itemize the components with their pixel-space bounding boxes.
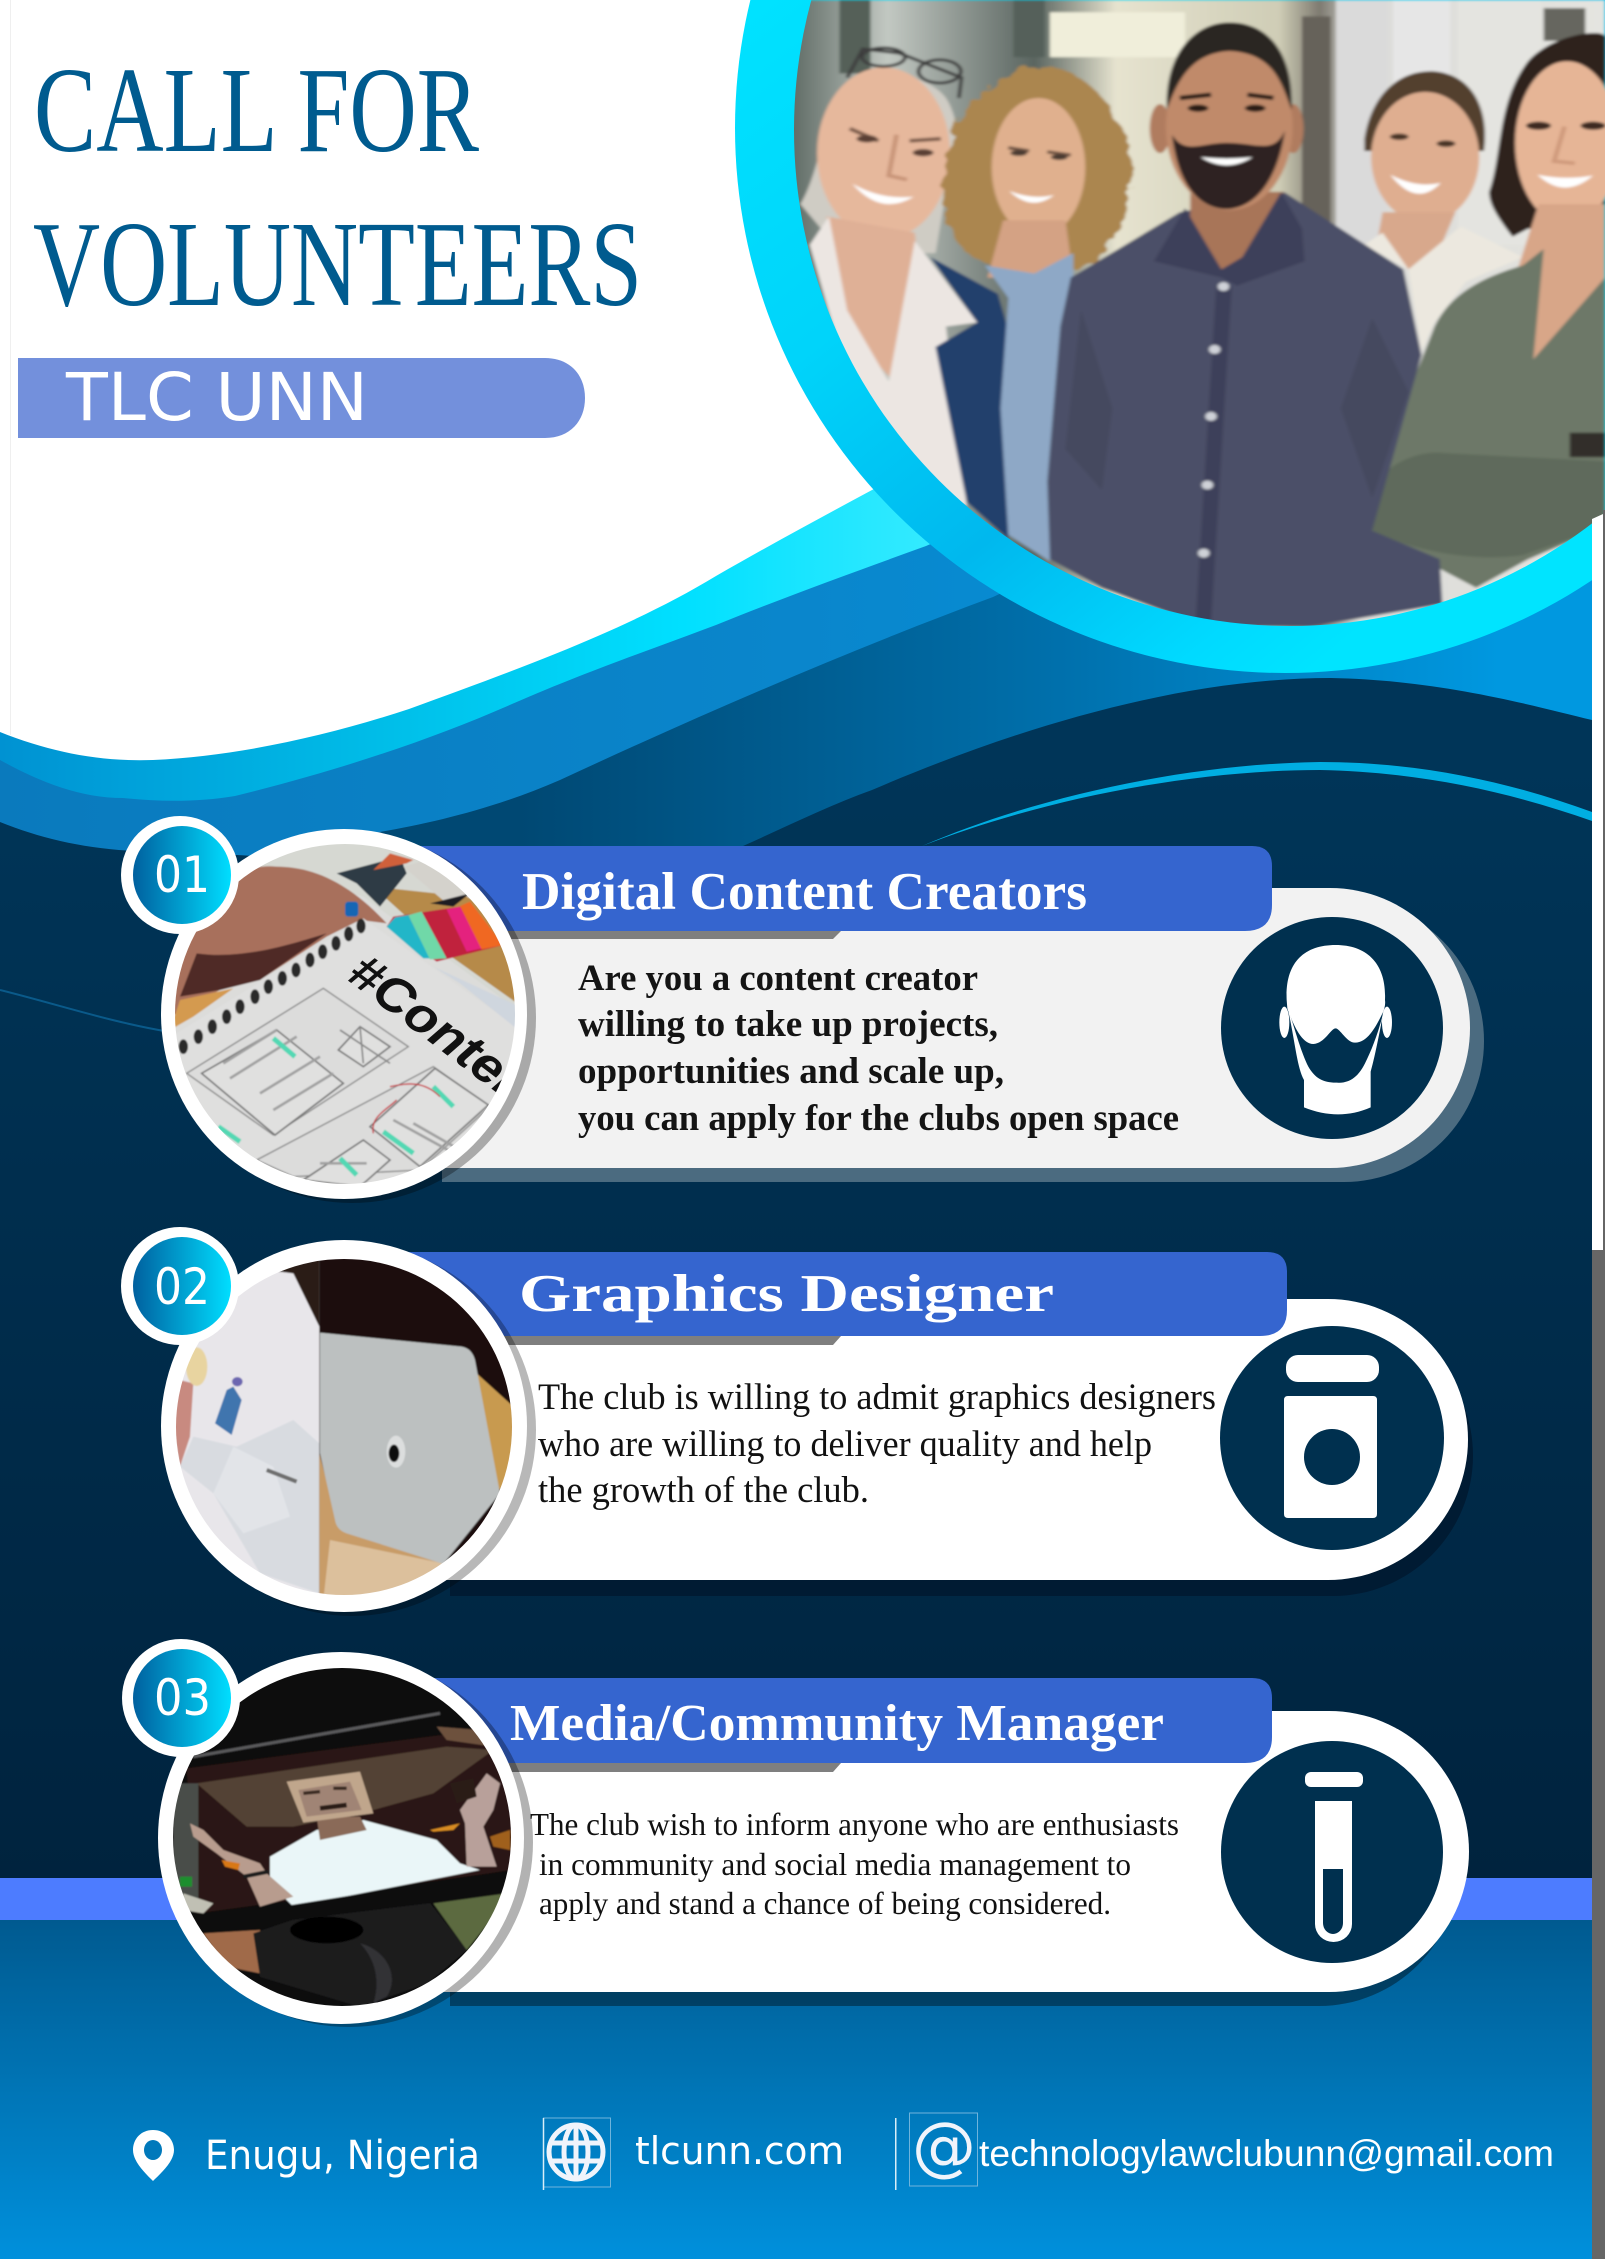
icon: bottle [1220, 1326, 1444, 1550]
heading: call for volunteers: CALL FOR [34, 43, 479, 178]
card 3 text: in community and social media management to [539, 1846, 1131, 1882]
footer background [0, 1920, 1592, 2259]
email text: technologylawclubunn@gmail.com [979, 2133, 1554, 2174]
card 3 text [530, 1806, 1179, 1921]
card 2 title bar [400, 1252, 1287, 1345]
card 1 text: Are you a content creator [578, 958, 978, 999]
photo: laptop and white shirt [176, 1259, 512, 1595]
icon: head with beard [1221, 917, 1443, 1139]
icon: location pin [133, 2130, 174, 2181]
footer: contact details [133, 2109, 1554, 2190]
card 1 body [420, 888, 1484, 1182]
number badge 03 [122, 1639, 240, 1757]
card 1 title bar: Digital Content Creators [522, 863, 1087, 921]
card 2 text: The club is willing to admit graphics designers [538, 1377, 1216, 1418]
card 2 text: who are willing to deliver quality and help [538, 1424, 1152, 1465]
icon: globe [544, 2118, 610, 2190]
photo: team of five people [790, 0, 1605, 640]
card 3 text: The club wish to inform anyone who are enthusiasts [530, 1806, 1179, 1842]
icon: at sign: @ [912, 2109, 976, 2184]
accent band [0, 1878, 1592, 1920]
card 1 title bar [400, 846, 1272, 939]
wave: gradient mid band [340, 500, 1592, 1000]
number badge 01 [121, 816, 239, 934]
card 2 text: the growth of the club. [538, 1470, 869, 1511]
heading: call for volunteers: VOLUNTEERS [33, 197, 642, 332]
number badge 01: 01 [154, 846, 210, 904]
photo: man on a screen [173, 1668, 511, 2006]
woman 4 [1364, 71, 1485, 151]
wave: blue band [0, 470, 1592, 1000]
panel: card 3 media community manager [122, 1639, 1469, 2030]
woman 1 [800, 75, 958, 253]
card 2 body [420, 1299, 1473, 1596]
photo: content notebook: #Conter [338, 942, 537, 1111]
right page edge [1592, 510, 1605, 2259]
panel: card 1 digital content creators [121, 816, 1484, 1210]
card 1 text: willing to take up projects, [578, 1004, 998, 1045]
card 2 text [538, 1377, 1216, 1511]
card 3 title bar: Media/Community Manager [510, 1695, 1164, 1752]
panel: card 2 graphics designer [121, 1227, 1473, 1620]
number badge 03: 03 [154, 1669, 211, 1727]
number badge 02 [121, 1227, 239, 1345]
card 3 circle frame [158, 1652, 533, 2027]
card 1 text: you can apply for the clubs open space [578, 1098, 1179, 1139]
subtitle pill: TLC UNN [18, 358, 585, 438]
card 3 body [420, 1711, 1469, 2006]
icon: test tube [1221, 1741, 1443, 1963]
card 3 text: apply and stand a chance of being considered. [539, 1885, 1111, 1921]
man center [1047, 192, 1442, 627]
card 2 title bar: Graphics Designer [519, 1265, 1054, 1323]
arc line [922, 762, 1592, 846]
card 1 text: opportunities and scale up, [578, 1051, 1004, 1092]
woman 2 [943, 65, 1133, 269]
panel: dark navy background [0, 678, 1592, 1900]
subtitle pill: TLC UNN: TLC UNN [65, 359, 368, 436]
card 2 circle frame [161, 1240, 536, 1616]
card 1 text [578, 958, 1179, 1139]
left hairline [10, 0, 11, 735]
heading: call for volunteers [33, 43, 642, 332]
divider [895, 2118, 896, 2190]
faint arc line [0, 990, 170, 1032]
woman 5 [1489, 33, 1605, 237]
photo ring [735, 0, 1605, 673]
card 1 circle frame [161, 829, 536, 1203]
card 3 title bar [400, 1678, 1272, 1772]
location text: Enugu, Nigeria [205, 2133, 480, 2179]
number badge 02: 02 [154, 1258, 210, 1316]
photo: content notebook [175, 844, 515, 1184]
wave: cyan band [0, 370, 1592, 1000]
website text: tlcunn.com [635, 2129, 844, 2173]
